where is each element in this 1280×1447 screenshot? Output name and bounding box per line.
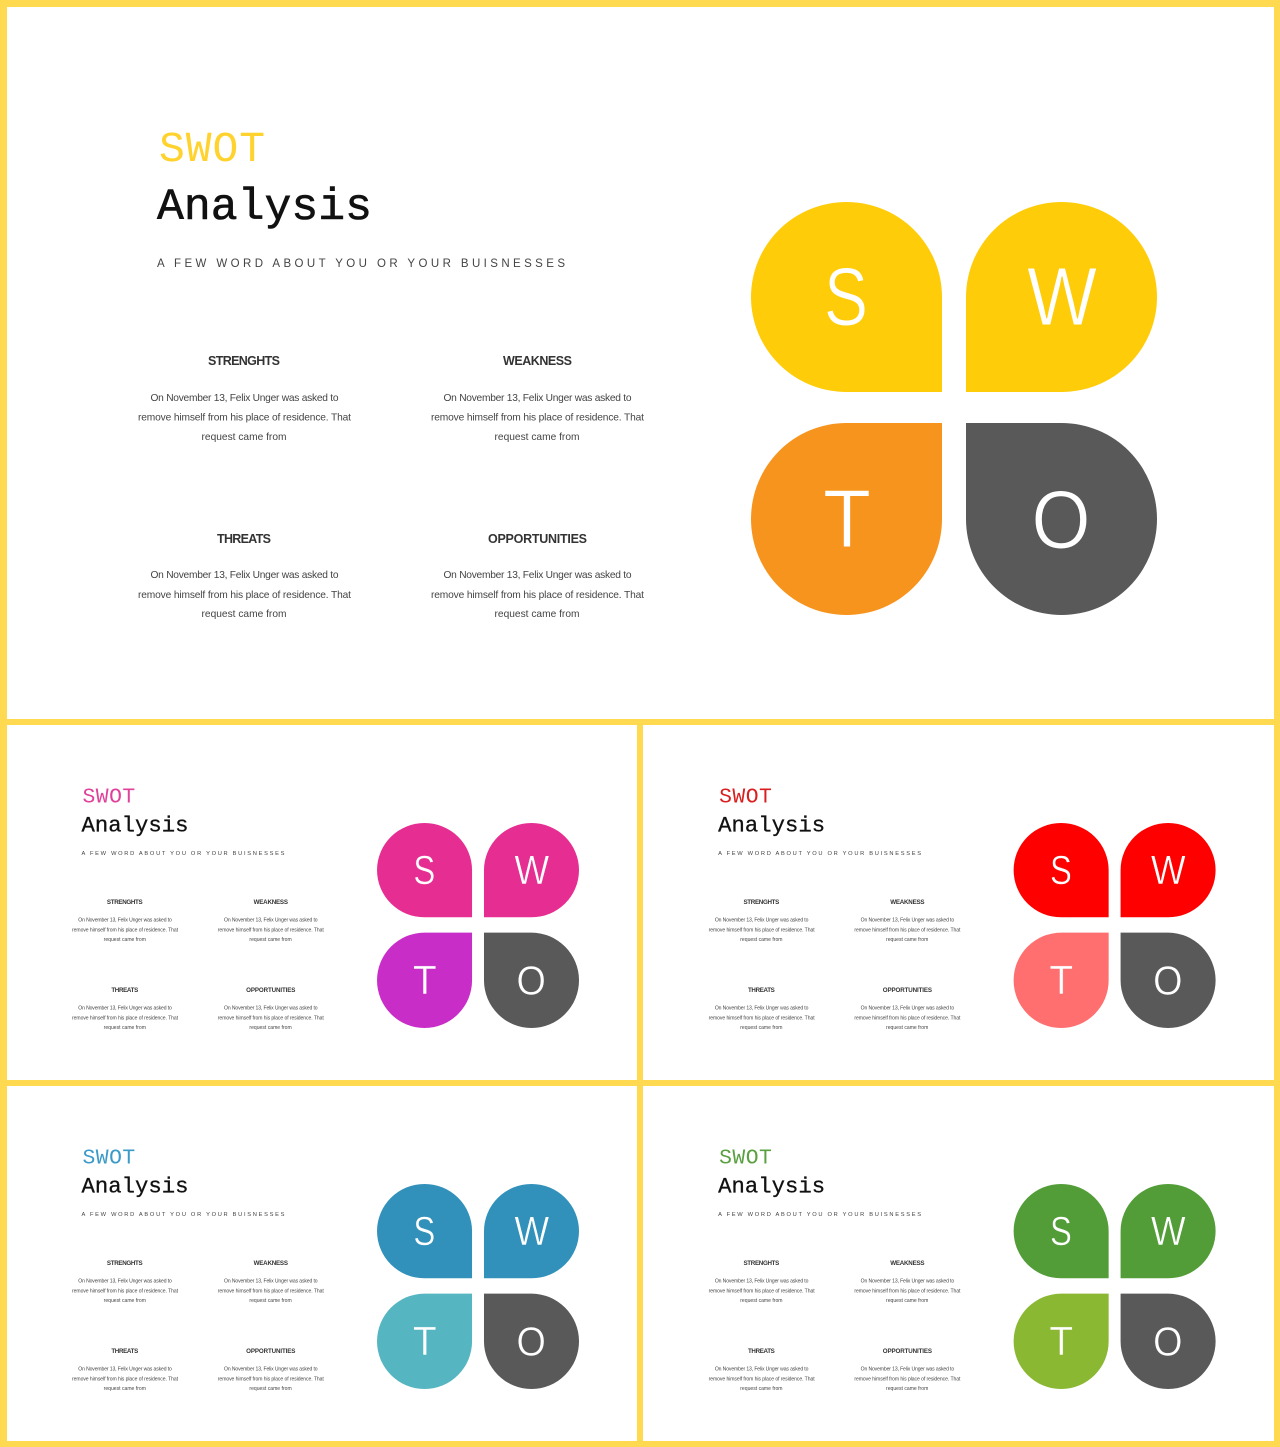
text block: threats: request came from	[104, 1025, 146, 1031]
text block: opportunities: On November 13, Felix Unger was asked to	[224, 1367, 318, 1373]
text block: strengths: STRENGHTS	[743, 899, 779, 906]
text block: threats: request came from	[740, 1025, 783, 1031]
text block: strengths: remove himself from his place of residence. That	[709, 927, 815, 933]
petal: S: S	[1050, 847, 1072, 893]
petal: S	[1014, 823, 1109, 917]
text block: strengths: request came from	[202, 432, 286, 443]
text block: weakness: WEAKNESS	[890, 899, 925, 906]
panel: red SWOT slide	[643, 725, 1274, 1080]
petal: T: T	[823, 472, 871, 565]
text block: opportunities: remove himself from his place of residence. That	[218, 1016, 324, 1022]
petal: T: T	[1049, 1318, 1073, 1364]
text block: threats: THREATS	[748, 987, 775, 994]
text block: opportunities: OPPORTUNITIES	[488, 532, 587, 546]
subtitle: A FEW WORD ABOUT YOU OR YOUR BUISNESSES	[82, 1212, 285, 1218]
text block: opportunities	[854, 1348, 961, 1392]
text block: weakness: remove himself from his place of residence. That	[218, 1288, 324, 1294]
text block: strengths: STRENGHTS	[208, 354, 280, 368]
text block: weakness	[854, 1260, 961, 1304]
text block: weakness: WEAKNESS	[254, 1260, 288, 1267]
title: SWOT: SWOT	[83, 786, 135, 810]
text block: threats	[709, 1348, 815, 1392]
petal: O: O	[517, 1319, 546, 1365]
panel: large yellow SWOT slide	[7, 7, 1274, 719]
petal: O	[1121, 1294, 1216, 1389]
text block: opportunities	[218, 1348, 324, 1392]
text block: weakness: WEAKNESS	[254, 899, 288, 906]
text block: strengths: request came from	[104, 937, 146, 943]
text block: opportunities: OPPORTUNITIES	[883, 987, 932, 994]
text block: strengths: STRENGHTS	[107, 1260, 143, 1267]
petal: W: W	[1027, 250, 1098, 343]
petal: T	[751, 423, 942, 615]
petal: O	[1121, 933, 1216, 1028]
title: Analysis: Analysis	[82, 812, 188, 838]
petal: W: W	[514, 1208, 549, 1254]
petal: S	[1014, 1184, 1109, 1278]
petal: S: S	[413, 847, 435, 893]
petal: T	[1014, 1294, 1109, 1389]
text block: threats	[72, 1348, 179, 1392]
petal: T	[1014, 933, 1109, 1028]
text block: threats: remove himself from his place of residence. That	[72, 1016, 179, 1022]
text block: threats: remove himself from his place of residence. That	[72, 1377, 179, 1383]
title: Analysis: Analysis	[718, 812, 825, 838]
text block: strengths: On November 13, Felix Unger was asked to	[715, 918, 809, 924]
text block: weakness	[854, 899, 961, 943]
petal: O: O	[1153, 958, 1183, 1004]
text block: opportunities: On November 13, Felix Unger was asked to	[861, 1006, 954, 1012]
text block: opportunities: remove himself from his place of residence. That	[218, 1377, 324, 1383]
petal: W	[1121, 823, 1216, 917]
text block: strengths: request came from	[740, 1298, 783, 1304]
text block: strengths: request came from	[104, 1298, 146, 1304]
text block: strengths	[138, 354, 351, 443]
text block: strengths	[709, 1260, 815, 1304]
text block: threats: remove himself from his place of residence. That	[138, 590, 351, 601]
text block: weakness: On November 13, Felix Unger was asked to	[224, 918, 318, 924]
petal: O: O	[1032, 473, 1090, 566]
text block: weakness	[218, 1260, 324, 1304]
text block: weakness: remove himself from his place of residence. That	[854, 927, 961, 933]
subtitle: A FEW WORD ABOUT YOU OR YOUR BUISNESSES	[82, 851, 285, 857]
petal: W: W	[1151, 1208, 1186, 1254]
title: Analysis: Analysis	[718, 1173, 825, 1199]
subtitle: A FEW WORD ABOUT YOU OR YOUR BUISNESSES	[157, 258, 565, 270]
petal: S	[377, 1184, 472, 1278]
petal: W	[1121, 1184, 1216, 1278]
text block: opportunities: request came from	[886, 1025, 928, 1031]
petal: S	[751, 202, 942, 392]
text block: opportunities: remove himself from his place of residence. That	[854, 1016, 961, 1022]
text block: opportunities: On November 13, Felix Unger was asked to	[861, 1367, 954, 1373]
text block: threats: request came from	[104, 1386, 146, 1392]
petal: W	[484, 823, 579, 917]
text block: threats	[72, 987, 179, 1031]
text block: threats: request came from	[740, 1386, 783, 1392]
text block: opportunities: remove himself from his place of residence. That	[854, 1377, 961, 1383]
text block: threats: On November 13, Felix Unger was asked to	[150, 570, 339, 581]
petal: W: W	[1151, 847, 1186, 893]
text block: strengths: On November 13, Felix Unger was asked to	[715, 1279, 809, 1285]
text block: weakness: On November 13, Felix Unger was asked to	[444, 393, 632, 404]
text block: weakness: WEAKNESS	[503, 354, 572, 368]
text block: strengths: STRENGHTS	[743, 1260, 779, 1267]
title: Analysis: Analysis	[157, 183, 372, 233]
panel: blue SWOT slide	[7, 1086, 637, 1441]
title: SWOT: SWOT	[159, 125, 265, 174]
text block: weakness: remove himself from his place of residence. That	[218, 927, 324, 933]
text block: opportunities: OPPORTUNITIES	[246, 987, 295, 994]
text block: strengths: remove himself from his place of residence. That	[72, 927, 179, 933]
text block: weakness: remove himself from his place of residence. That	[854, 1288, 961, 1294]
text block: opportunities: On November 13, Felix Unger was asked to	[444, 570, 632, 581]
text block: strengths: request came from	[740, 937, 783, 943]
text block: threats: THREATS	[111, 1348, 138, 1355]
petal: T: T	[413, 957, 437, 1003]
text block: strengths	[709, 899, 815, 943]
petal: W	[966, 202, 1157, 392]
text block: opportunities	[431, 532, 644, 620]
petal: O: O	[517, 958, 546, 1004]
text block: threats: On November 13, Felix Unger was asked to	[715, 1006, 809, 1012]
text block: weakness: On November 13, Felix Unger was asked to	[861, 1279, 954, 1285]
text block: threats: On November 13, Felix Unger was asked to	[715, 1367, 809, 1373]
text block: threats: THREATS	[217, 532, 271, 546]
petal: T	[377, 933, 472, 1028]
text block: strengths	[72, 1260, 179, 1304]
text block: weakness: On November 13, Felix Unger was asked to	[224, 1279, 318, 1285]
text block: weakness: request came from	[249, 1298, 292, 1304]
title: SWOT: SWOT	[83, 1147, 135, 1171]
petal: O	[484, 1294, 579, 1389]
text block: strengths: On November 13, Felix Unger was asked to	[78, 1279, 172, 1285]
petal: W	[484, 1184, 579, 1278]
text block: opportunities: On November 13, Felix Unger was asked to	[224, 1006, 318, 1012]
petal: S	[377, 823, 472, 917]
title: SWOT: SWOT	[719, 1147, 772, 1171]
text block: opportunities	[854, 987, 961, 1031]
text block: threats: remove himself from his place of residence. That	[709, 1016, 815, 1022]
text block: opportunities: request came from	[494, 609, 580, 620]
text block: weakness: request came from	[886, 1298, 928, 1304]
title: Analysis: Analysis	[82, 1173, 188, 1199]
text block: weakness	[431, 354, 644, 443]
panel: green SWOT slide	[643, 1086, 1274, 1441]
text block: weakness	[218, 899, 324, 943]
text block: weakness: request came from	[886, 937, 928, 943]
petal: T	[377, 1294, 472, 1389]
text block: opportunities: remove himself from his place of residence. That	[431, 590, 644, 601]
text block: threats: On November 13, Felix Unger was asked to	[78, 1367, 172, 1373]
petal: O: O	[1153, 1319, 1183, 1365]
text block: strengths: STRENGHTS	[107, 899, 143, 906]
text block: threats: On November 13, Felix Unger was asked to	[78, 1006, 172, 1012]
text block: weakness: request came from	[249, 937, 292, 943]
text block: threats: request came from	[202, 609, 286, 620]
subtitle: A FEW WORD ABOUT YOU OR YOUR BUISNESSES	[718, 1212, 921, 1218]
text block: opportunities: request came from	[249, 1025, 292, 1031]
petal: W: W	[514, 847, 549, 893]
text block: threats: remove himself from his place of residence. That	[709, 1377, 815, 1383]
text block: weakness: On November 13, Felix Unger was asked to	[861, 918, 954, 924]
petal: S: S	[1050, 1208, 1072, 1254]
petal: O	[484, 933, 579, 1028]
text block: threats	[709, 987, 815, 1031]
text block: threats	[138, 532, 351, 620]
petal: T: T	[413, 1318, 437, 1364]
text block: strengths: On November 13, Felix Unger was asked to	[78, 918, 172, 924]
text block: opportunities: request came from	[886, 1386, 928, 1392]
panel: pink SWOT slide	[7, 725, 637, 1080]
text block: threats: THREATS	[748, 1348, 775, 1355]
text block: weakness: remove himself from his place of residence. That	[431, 412, 644, 424]
title: SWOT: SWOT	[719, 786, 772, 810]
text block: strengths: remove himself from his place of residence. That	[138, 412, 351, 424]
text block: opportunities: request came from	[249, 1386, 292, 1392]
petal: S: S	[413, 1208, 435, 1254]
petal: T: T	[1049, 957, 1073, 1003]
text block: strengths: remove himself from his place of residence. That	[709, 1288, 815, 1294]
text block: strengths: On November 13, Felix Unger was asked to	[150, 393, 339, 404]
text block: strengths: remove himself from his place of residence. That	[72, 1288, 179, 1294]
text block: opportunities: OPPORTUNITIES	[246, 1348, 295, 1355]
text block: opportunities	[218, 987, 324, 1031]
petal: S: S	[824, 250, 868, 343]
text block: weakness: WEAKNESS	[890, 1260, 925, 1267]
subtitle: A FEW WORD ABOUT YOU OR YOUR BUISNESSES	[718, 851, 921, 857]
text block: opportunities: OPPORTUNITIES	[883, 1348, 932, 1355]
petal: O	[966, 423, 1157, 615]
text block: strengths	[72, 899, 179, 943]
text block: threats: THREATS	[111, 987, 138, 994]
text block: weakness: request came from	[494, 432, 580, 443]
